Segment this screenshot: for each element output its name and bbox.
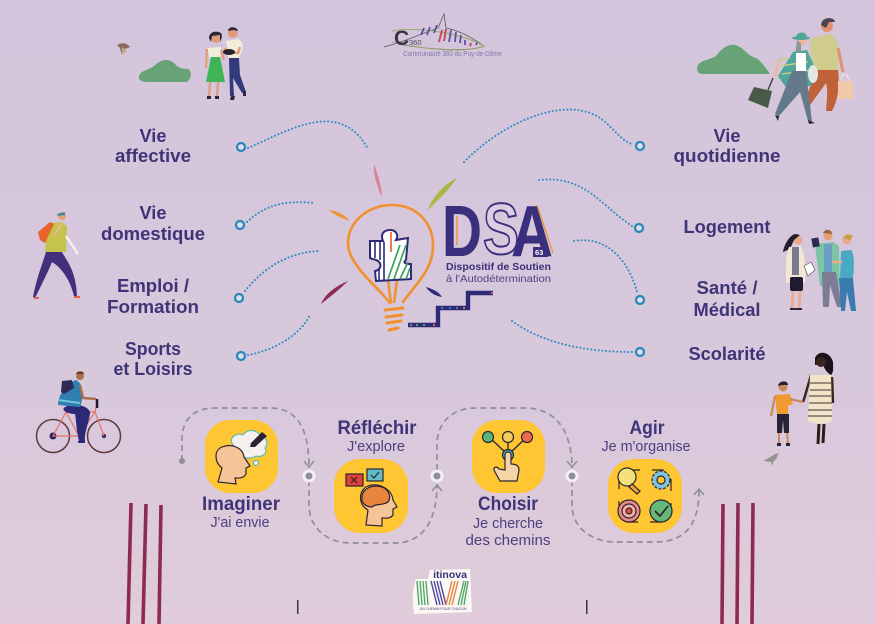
puzzle piece [370, 230, 411, 281]
logo: Communauté 360: 360 [409, 38, 422, 47]
illustration: cyclist [36, 371, 120, 452]
central logo: subtitle: Dispositif de Soutien [446, 261, 551, 273]
step label: Réfléchir: Réfléchir [338, 418, 417, 439]
central logo: staircase [408, 293, 493, 325]
step label: Imaginer [202, 494, 281, 531]
tick marks [297, 600, 588, 614]
label: Emploi / Formation: Formation [107, 297, 199, 317]
step label: Choisir [466, 494, 550, 549]
logo: Communauté 360: Communauté 360 du Puy-de-Dôme [403, 49, 502, 58]
label: Santé / Médical: Médical [694, 300, 760, 320]
connector: Sports et Loisirs [237, 315, 310, 360]
central logo: DSA wordmark: S [483, 190, 519, 270]
step label: Imaginer: J'ai envie [210, 515, 270, 531]
label: Sports et Loisirs [114, 339, 192, 379]
step label: Agir [602, 418, 690, 455]
label: Vie domestique [101, 203, 205, 244]
label: Vie quotidienne: quotidienne [674, 146, 780, 166]
step label: Choisir: des chemins [466, 533, 550, 549]
label: Emploi / Formation: Emploi / [117, 276, 189, 296]
connector: Scolarité [512, 321, 644, 356]
label: Logement: Logement [684, 217, 770, 237]
connector: Vie domestique [236, 202, 314, 229]
label: Sports et Loisirs: et Loisirs [114, 359, 192, 379]
connector: Santé / Médical [574, 240, 644, 304]
step icon: Choisir [472, 420, 545, 493]
logo: itinova: itinova [433, 569, 467, 581]
step icon: Réfléchir [334, 459, 408, 533]
illustration: bush top left [139, 60, 191, 82]
central logo: light bulb [321, 164, 457, 330]
label: Santé / Médical: Santé / [696, 278, 758, 298]
step label: Agir: Agir [630, 418, 665, 439]
step icon: Agir [608, 459, 682, 533]
step icon: Imaginer [205, 420, 278, 493]
connector: Logement [539, 179, 643, 232]
illustration: couple [206, 27, 246, 100]
label: Santé / Médical [694, 278, 760, 320]
illustration: mother and child [771, 353, 833, 446]
logo: itinova: UN CHEMIN POUR CHACUN [420, 607, 467, 611]
step label: Réfléchir: J'explore [347, 439, 405, 455]
dashed process path [179, 408, 704, 543]
central logo: subtitle [446, 261, 551, 285]
connector: Vie affective [237, 121, 368, 151]
central logo: DSA wordmark: D [442, 192, 482, 272]
label: Vie quotidienne [674, 126, 780, 166]
central logo: DSA wordmark: A [511, 192, 553, 272]
step label: Agir: Je m'organise [602, 439, 690, 455]
illustration: bird top left [117, 43, 130, 55]
label: Vie domestique: domestique [101, 224, 205, 244]
label: Vie affective [115, 126, 191, 166]
step label: Choisir: Je cherche [473, 516, 543, 532]
label: Sports et Loisirs: Sports [125, 339, 181, 359]
logo: Communauté 360: C [394, 27, 409, 50]
label: Vie quotidienne: Vie [714, 126, 740, 146]
step label: Choisir: Choisir [478, 494, 539, 515]
illustration: walker [33, 212, 80, 299]
connector: Emploi / Formation [235, 251, 318, 302]
illustration: bush top right [697, 45, 770, 74]
label: Emploi / Formation [107, 276, 199, 317]
illustration: medical team [783, 230, 856, 311]
label: Vie domestique: Vie [140, 203, 166, 223]
central logo: DSA wordmark [442, 190, 553, 272]
central logo: DSA wordmark: 63 [535, 248, 543, 257]
logo: itinova [413, 569, 472, 614]
label: Vie affective: affective [115, 146, 191, 166]
connector: Vie quotidienne [464, 110, 644, 162]
central logo: subtitle: à l'Autodétermination [446, 273, 551, 285]
step label: Réfléchir [338, 418, 417, 455]
illustration: grey bird [763, 453, 779, 466]
label: Vie affective: Vie [140, 126, 166, 146]
decorative curtain lines left [128, 503, 161, 624]
logo: Communauté 360 [384, 14, 502, 58]
label: Scolarité: Scolarité [688, 344, 766, 364]
step label: Imaginer: Imaginer [202, 494, 281, 515]
decorative curtain lines right [722, 503, 753, 624]
illustration: travellers [748, 18, 853, 124]
